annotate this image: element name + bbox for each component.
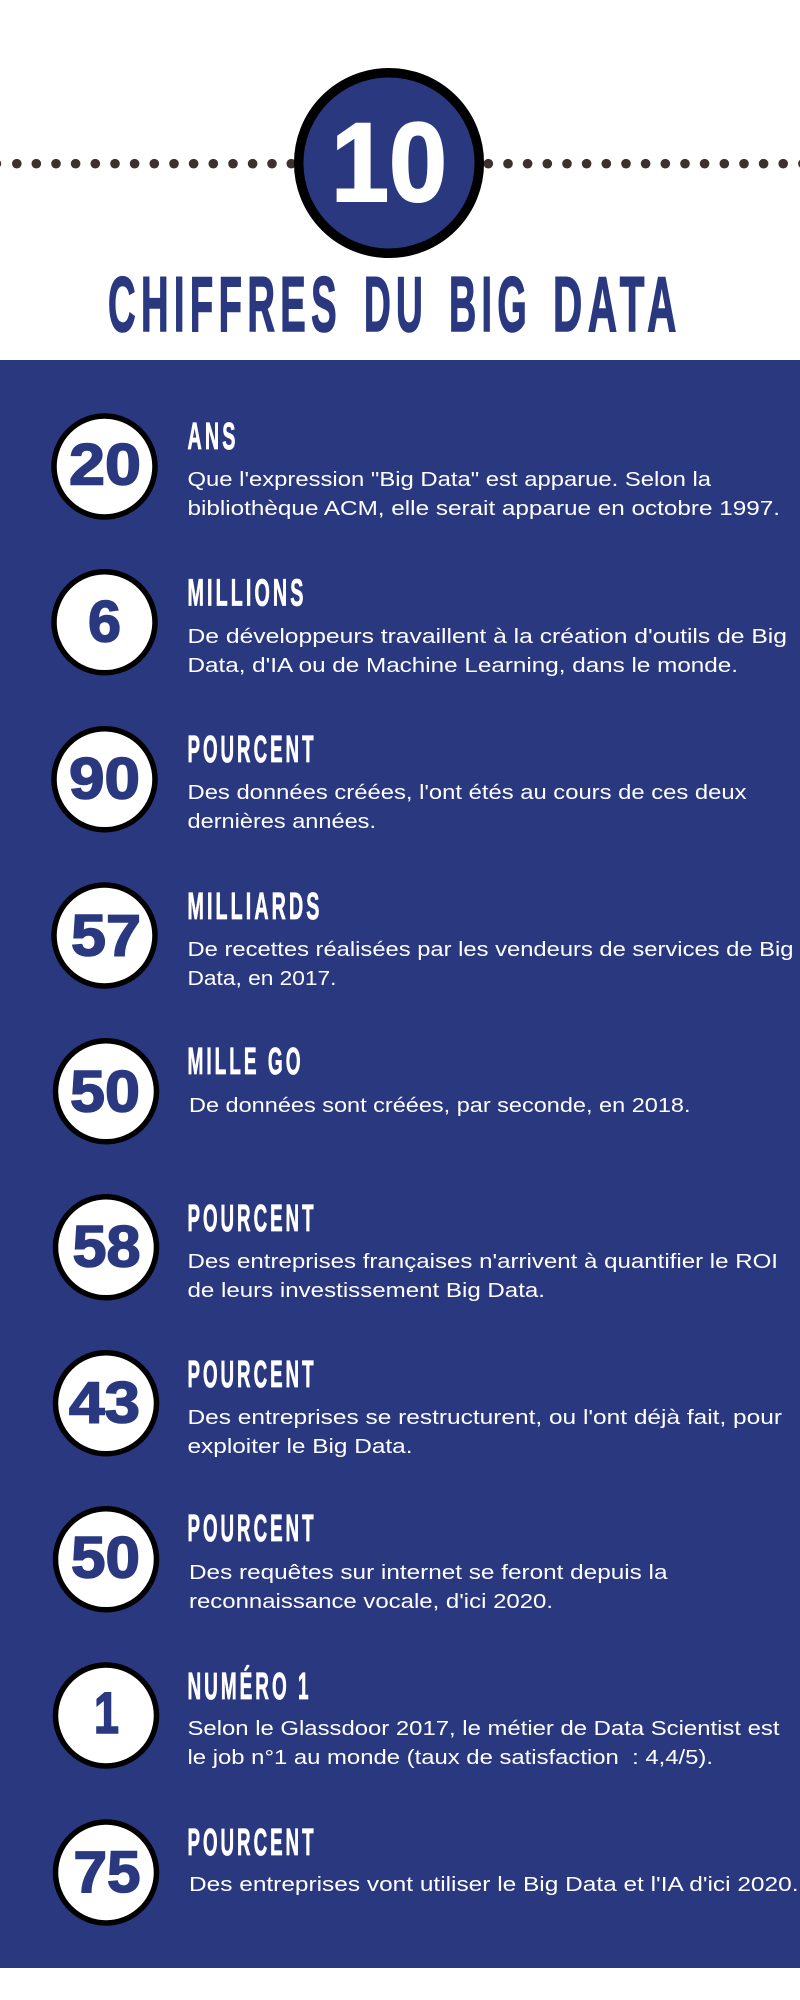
stat row: 43 pourcent: POURCENT <box>188 1354 316 1396</box>
stat row: 43 pourcent: 43 <box>69 1370 140 1436</box>
stat row: 58 pourcent: POURCENT <box>188 1198 316 1240</box>
stat row: 50 mille Go: 50 <box>70 1060 140 1124</box>
dotted line <box>0 159 800 168</box>
stat row: 75 pourcent: 75 <box>74 1840 140 1905</box>
big circle with number 10 <box>299 73 479 253</box>
title: DATA <box>553 260 682 348</box>
stat row: 57 milliards: MILLIARDS <box>188 886 322 928</box>
title: BIG <box>449 260 532 348</box>
stat row: 58 pourcent: de leurs investissement Big Data. <box>188 1279 545 1302</box>
stat row: 6 millions: 6 <box>88 590 121 654</box>
stat row: 43 pourcent <box>56 1353 782 1458</box>
stat row: 57 milliards: 57 <box>71 904 141 968</box>
title: CHIFFRES <box>108 260 342 348</box>
stat row: 75 pourcent: POURCENT <box>188 1822 316 1864</box>
big circle with number 10: 10 <box>331 100 447 225</box>
stat row: 20 ans: bibliothèque ACM, elle serait apparue en octobre 1997. <box>188 497 780 520</box>
stat row: 58 pourcent: 58 <box>72 1214 140 1280</box>
stat row: numéro 1: Selon le Glassdoor 2017, le métier de Data Scientist est <box>188 1717 780 1740</box>
stat row: 6 millions <box>54 572 787 677</box>
stat row: 50 mille Go: MILLE GO <box>188 1041 304 1083</box>
stat row: 58 pourcent: Des entreprises françaises n'arrivent à quantifier le ROI <box>188 1250 778 1273</box>
stat row: 20 ans: 20 <box>69 432 141 498</box>
stat row: 50 mille Go: De données sont créées, par seconde, en 2018. <box>189 1094 690 1117</box>
title: DU <box>364 260 428 348</box>
stat row: 50 pourcent: 50 <box>71 1526 140 1590</box>
stat row: numéro 1 <box>56 1664 780 1769</box>
stat row: 20 ans <box>54 416 780 520</box>
stat row: 90 pourcent: dernières années. <box>188 810 376 833</box>
stat row: 6 millions: MILLIONS <box>188 572 306 614</box>
stat row: 90 pourcent: POURCENT <box>188 729 316 771</box>
stat row: 20 ans: ANS <box>188 416 238 458</box>
stat row: 43 pourcent: exploiter le Big Data. <box>188 1435 412 1458</box>
stat row: 50 pourcent: Des requêtes sur internet se feront depuis la <box>189 1561 668 1584</box>
stat row: numéro 1: NUMÉRO 1 <box>188 1664 312 1708</box>
stat row: 50 pourcent <box>56 1508 668 1613</box>
stat row: 50 pourcent: POURCENT <box>188 1508 316 1550</box>
stat row: 43 pourcent: Des entreprises se restructurent, ou l'ont déjà fait, pour <box>188 1406 782 1429</box>
stat row: numéro 1: 1 <box>94 1681 119 1746</box>
stat row: 50 pourcent: reconnaissance vocale, d'ici 2020. <box>189 1590 553 1613</box>
stat row: 57 milliards <box>54 885 794 990</box>
stat row: 6 millions: Data, d'IA ou de Machine Learning, dans le monde. <box>188 654 738 677</box>
stat row: 50 mille Go <box>56 1041 690 1142</box>
stat row: 90 pourcent <box>54 729 747 833</box>
stat row: 90 pourcent: 90 <box>69 746 140 812</box>
stat row: 6 millions: De développeurs travaillent à la création d'outils de Big <box>188 625 787 648</box>
stat row: 75 pourcent: Des entreprises vont utiliser le Big Data et l'IA d'ici 2020. <box>189 1873 798 1896</box>
stat row: 75 pourcent <box>56 1822 798 1923</box>
stat row: numéro 1: le job n°1 au monde (taux de satisfaction : 4,4/5). <box>188 1746 713 1769</box>
stat row: 90 pourcent: Des données créées, l'ont étés au cours de ces deux <box>188 781 747 804</box>
stat row: 20 ans: Que l'expression "Big Data" est apparue. Selon la <box>188 468 712 491</box>
stat row: 57 milliards: De recettes réalisées par les vendeurs de services de Big <box>188 938 794 961</box>
stat row: 58 pourcent <box>56 1197 778 1302</box>
stat row: 57 milliards: Data, en 2017. <box>188 967 336 990</box>
